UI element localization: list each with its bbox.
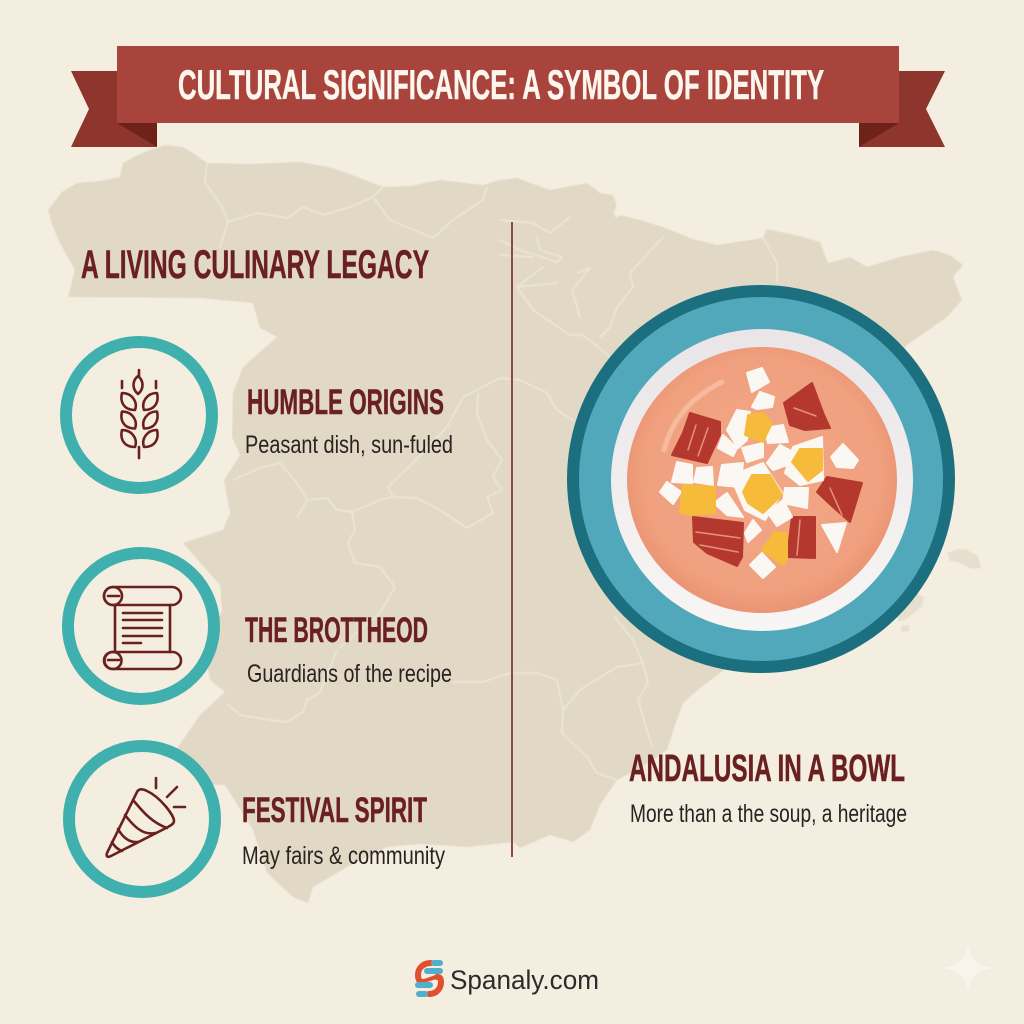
left ribbon fold	[117, 123, 157, 147]
icon: wheat	[121, 370, 158, 458]
soup bowl illustration	[567, 285, 955, 673]
item: humble origins	[66, 342, 453, 488]
item heading: HUMBLE ORIGINS	[247, 383, 444, 422]
right ribbon fold	[859, 123, 899, 147]
bacon fat streaks	[688, 408, 842, 555]
left ribbon tail	[71, 71, 157, 147]
item description: Guardians of the recipe	[247, 660, 452, 688]
item description: Peasant dish, sun-fuled	[245, 431, 453, 459]
item description: May fairs & community	[242, 842, 445, 870]
white bowl	[611, 329, 913, 631]
plate outer ring	[567, 285, 955, 673]
brand logo	[418, 963, 599, 995]
item heading: FESTIVAL SPIRIT	[242, 791, 427, 830]
icon ring	[66, 342, 212, 488]
item: the brotherhood	[68, 553, 452, 699]
icon ring	[68, 553, 214, 699]
icon: scroll	[104, 587, 181, 669]
map of Spain	[48, 145, 981, 903]
soup swirl	[664, 382, 722, 450]
title banner	[71, 46, 945, 147]
logo wordmark: Spanaly.com	[450, 965, 599, 995]
item heading: THE BROTTHEOD	[245, 611, 428, 650]
sparkle	[944, 944, 992, 992]
caption: andalusia in a bowl	[629, 748, 907, 828]
caption description: More than a the soup, a heritage	[630, 800, 907, 828]
item: festival spirit	[69, 746, 445, 892]
soup	[627, 347, 897, 613]
plate inner	[579, 297, 943, 661]
toppings: egg white	[660, 368, 858, 578]
banner body	[117, 46, 899, 123]
right ribbon tail	[859, 71, 945, 147]
icon ring	[69, 746, 215, 892]
icon: party cone	[107, 778, 185, 857]
toppings: egg yolk	[680, 413, 822, 565]
toppings: bacon	[672, 383, 862, 566]
logo mark	[418, 963, 441, 994]
heading: a living culinary legacy: A LIVING CULINARY LEGACY	[81, 243, 429, 287]
vertical divider	[511, 222, 513, 857]
